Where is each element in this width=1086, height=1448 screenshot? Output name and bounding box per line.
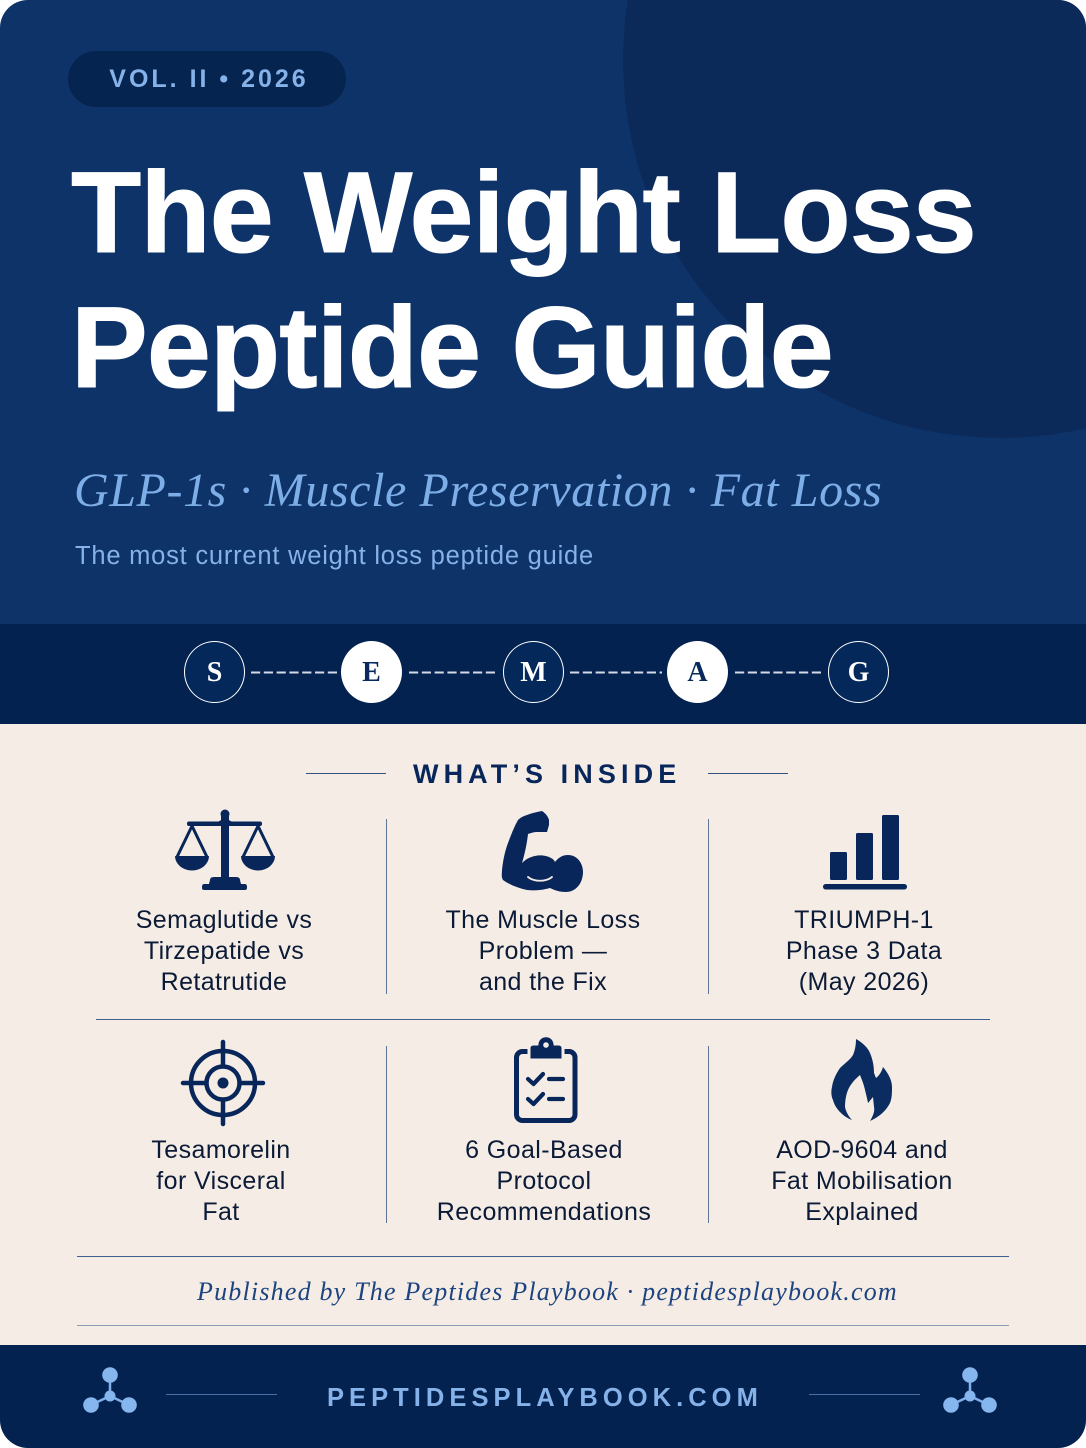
text: item 4: Fat [202, 1198, 240, 1226]
icon: flexed arm [502, 811, 583, 892]
panel: footer [0, 1345, 1086, 1448]
tagline: The most current weight loss peptide guide [75, 542, 594, 570]
badge: volume: VOL. II • 2026 [109, 65, 309, 93]
text: item 1: Retatrutide [161, 968, 287, 996]
text: item 6: AOD-9604 and [776, 1136, 948, 1164]
badge: volume [68, 51, 346, 107]
text: item 5 [437, 1136, 651, 1226]
icon: molecule right [943, 1367, 997, 1413]
SEMAG letter G: G [848, 657, 869, 688]
text: item 1 [136, 906, 312, 996]
text: item 6: Explained [805, 1198, 919, 1226]
publisher credit: Published by The Peptides Playbook · peptidesplaybook.com [197, 1277, 898, 1306]
title [71, 149, 976, 412]
decorative dark circle [623, 0, 1086, 438]
panel: header [0, 0, 1086, 624]
subtitle: GLP-1s · Muscle Preservation · Fat Loss [74, 464, 882, 517]
SEMAG letter M [503, 641, 564, 703]
SEMAG letter S: S [207, 657, 222, 688]
text: item 3: (May 2026) [799, 968, 929, 996]
SEMAG letter A [667, 641, 728, 703]
text: item 6: Fat Mobilisation [771, 1167, 953, 1195]
icon: target [180, 1040, 266, 1126]
text: item 5: Protocol [497, 1167, 591, 1195]
title: The Weight Loss [71, 149, 976, 277]
text: item 1: Semaglutide vs [136, 906, 312, 934]
text: item 5: 6 Goal-Based [465, 1136, 623, 1164]
icon: bar chart [822, 815, 907, 890]
text: item 4 [151, 1136, 291, 1226]
text: item 3 [786, 906, 942, 996]
panel: SEMAG band [0, 624, 1086, 724]
icon: flame [831, 1039, 892, 1121]
heading: what's inside: WHAT’S INSIDE [413, 759, 681, 789]
SEMAG letter S [184, 641, 245, 703]
text: item 2 [446, 906, 640, 996]
icon: balance scales [175, 810, 275, 890]
footer url: PEPTIDESPLAYBOOK.COM [327, 1384, 763, 1412]
SEMAG letter E [341, 641, 402, 703]
text: item 4: for Visceral [156, 1167, 286, 1195]
icon: molecule left [83, 1367, 137, 1413]
icon: clipboard checklist [514, 1037, 578, 1123]
text: item 5: Recommendations [437, 1198, 651, 1226]
text: item 1: Tirzepatide vs [144, 937, 304, 965]
SEMAG letter A: A [687, 657, 708, 688]
text: item 4: Tesamorelin [151, 1136, 291, 1164]
SEMAG letter M: M [520, 657, 547, 688]
SEMAG letter E: E [362, 657, 381, 688]
text: item 3: TRIUMPH-1 [794, 906, 934, 934]
text: item 3: Phase 3 Data [786, 937, 942, 965]
text: item 6 [771, 1136, 953, 1226]
SEMAG connectors [251, 672, 821, 674]
text: item 2: The Muscle Loss [446, 906, 640, 934]
text: item 2: Problem — [479, 937, 607, 965]
title: Peptide Guide [71, 284, 833, 412]
text: item 2: and the Fix [479, 968, 607, 996]
SEMAG letter G [828, 641, 889, 703]
